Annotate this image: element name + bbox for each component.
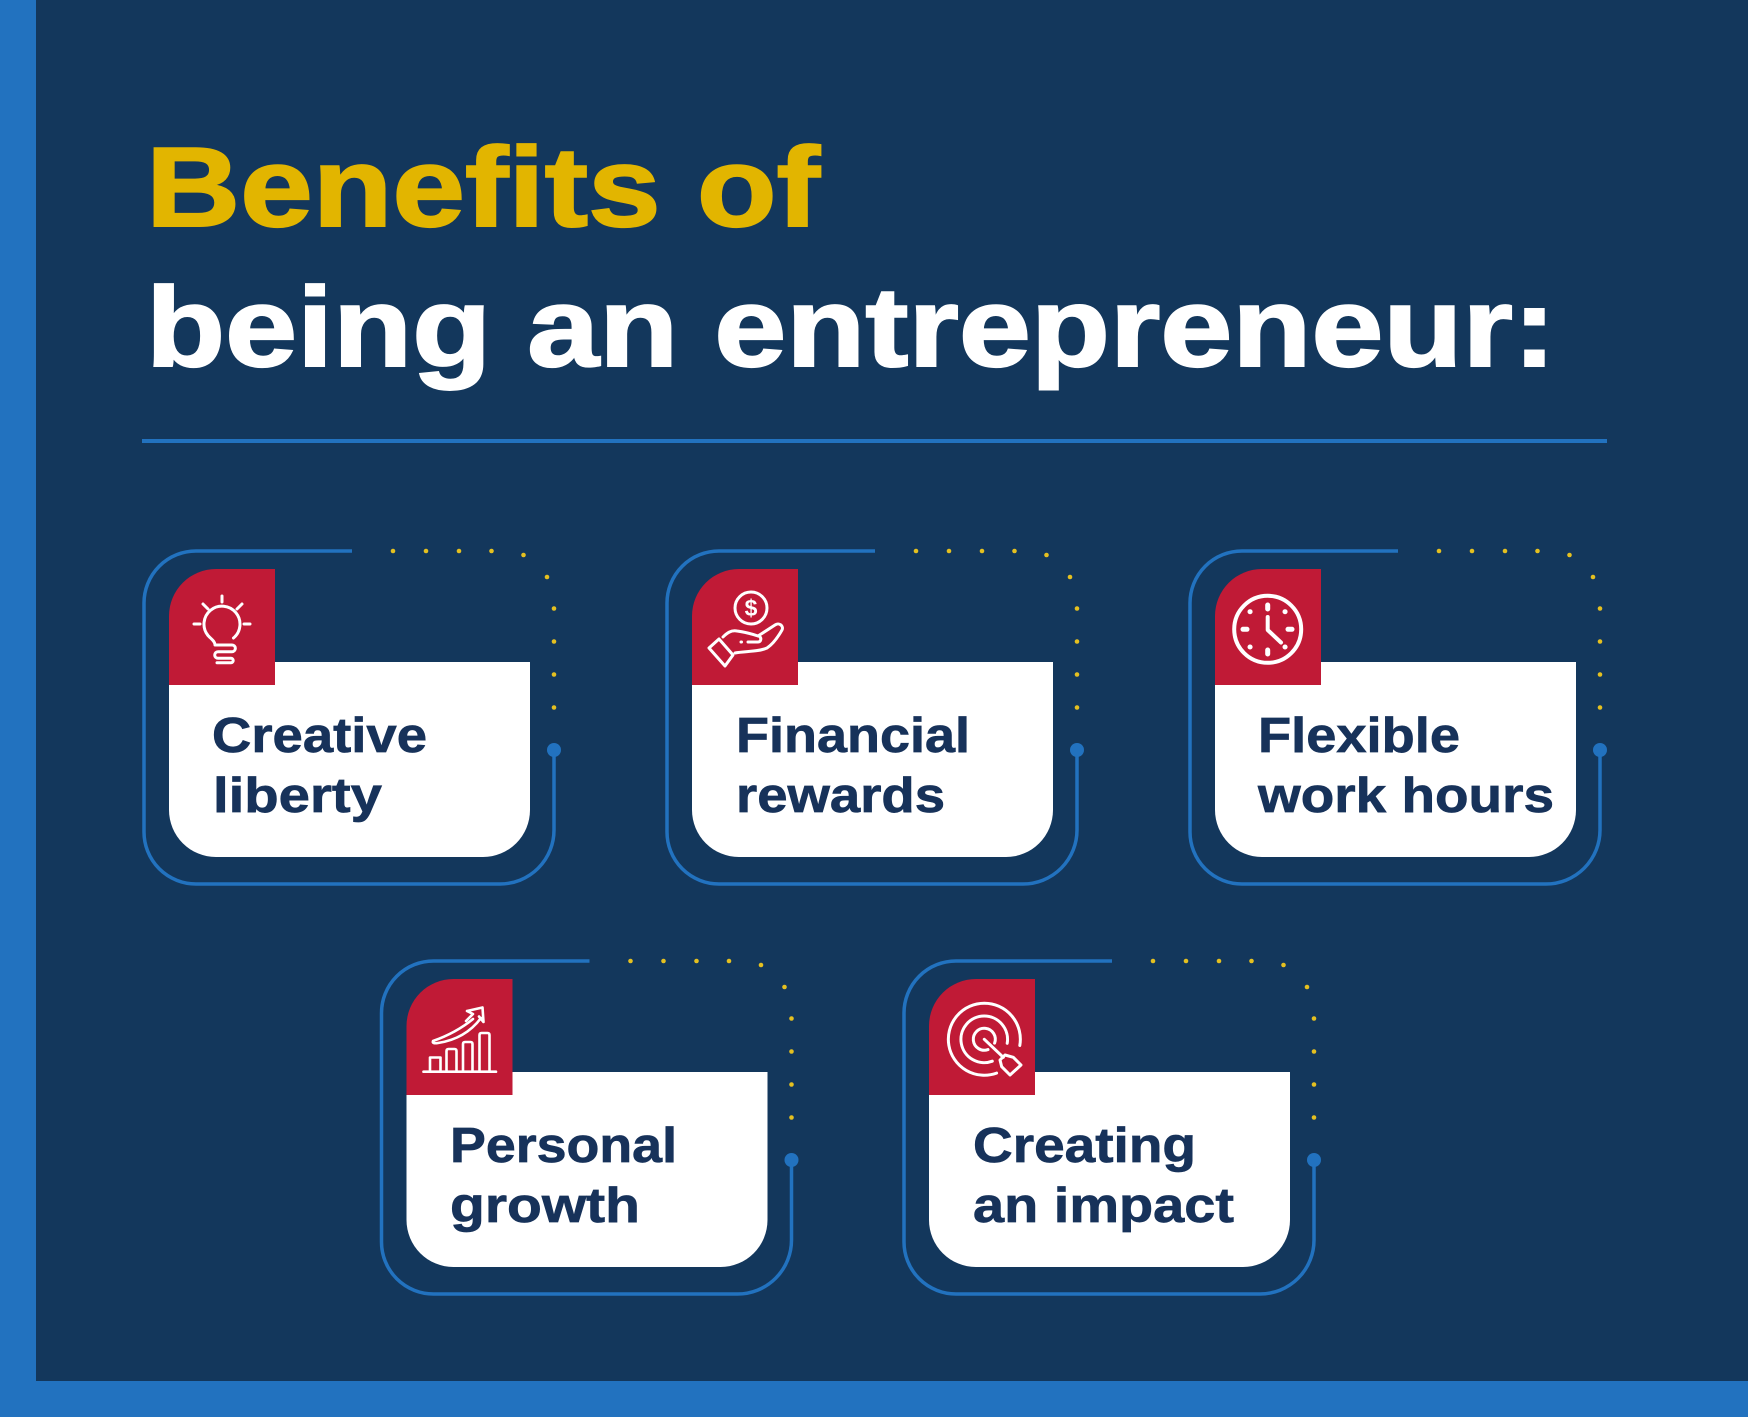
label: rewards — [736, 769, 945, 823]
title line: being an entrepreneur: being an entrepreneur: — [146, 264, 1556, 390]
label: Financial — [736, 709, 970, 763]
icon: light bulb — [194, 596, 250, 663]
icon: growth chart — [424, 1008, 496, 1072]
label — [736, 709, 970, 823]
label: an impact — [973, 1179, 1234, 1233]
label — [450, 1119, 677, 1233]
icon: hand holding coin: $ — [745, 595, 758, 621]
card frame — [667, 549, 1084, 884]
label: growth — [450, 1179, 640, 1233]
panel: flexible work hours — [1190, 549, 1607, 884]
panel: personal growth — [382, 959, 798, 1294]
label: Creative — [212, 709, 427, 763]
title line: benefits of: Benefits of — [146, 124, 820, 250]
card frame — [904, 959, 1321, 1294]
label — [1257, 709, 1554, 823]
label: work hours — [1257, 769, 1554, 823]
card frame — [1190, 549, 1607, 884]
icon: target with arrow — [948, 1003, 1021, 1075]
label — [973, 1119, 1234, 1233]
label: Creating — [973, 1119, 1196, 1173]
label — [212, 709, 427, 823]
panel: creating an impact — [904, 959, 1321, 1294]
icon: clock — [1234, 596, 1301, 663]
panel: financial rewards — [667, 549, 1084, 884]
label: Personal — [450, 1119, 677, 1173]
label: liberty — [213, 769, 382, 823]
card frame — [144, 549, 561, 884]
panel: creative liberty — [144, 549, 561, 884]
label: Flexible — [1258, 709, 1460, 763]
title — [146, 124, 1556, 390]
card frame — [382, 959, 798, 1294]
icon: hand holding coin — [709, 592, 782, 666]
